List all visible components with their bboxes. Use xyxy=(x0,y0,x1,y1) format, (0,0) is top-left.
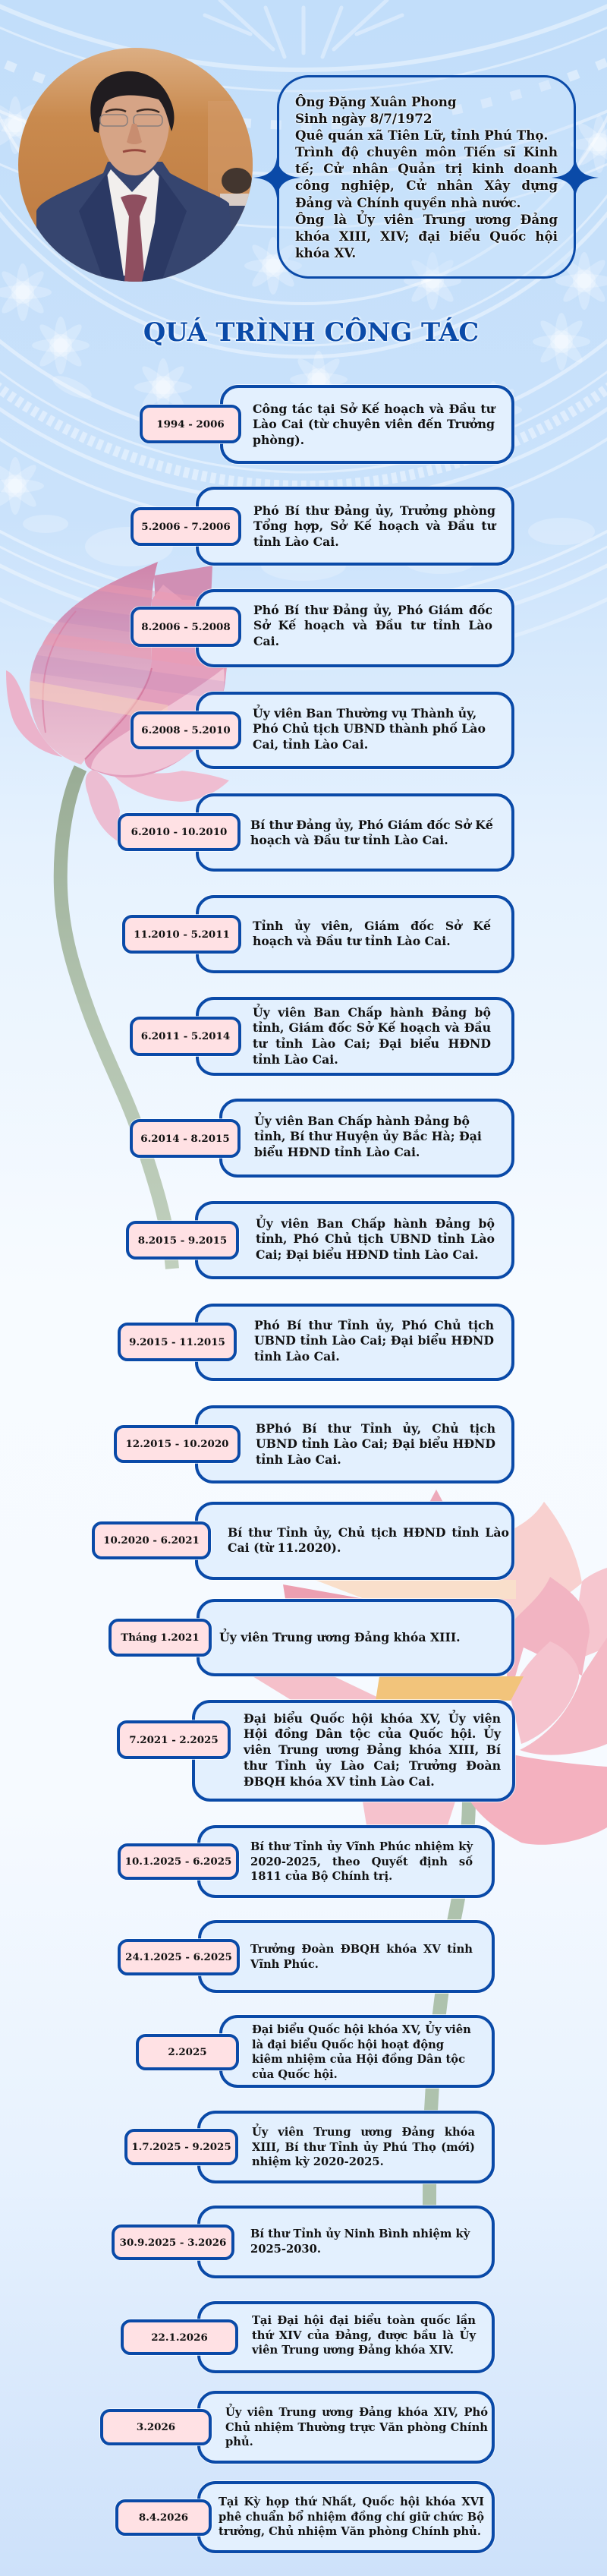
decoration: lotus bud left xyxy=(6,562,235,1269)
entry: 6.2014 - 8.2015: biểu HĐND tỉnh Lào Cai. xyxy=(254,1145,420,1159)
entry: 3.2026 xyxy=(99,2390,495,2464)
entry: 2.2025: của Quốc hội. xyxy=(252,2068,338,2081)
entry: 5.2006 - 7.2006 xyxy=(130,486,515,566)
entry: 24.1.2025 - 6.2025 xyxy=(117,1919,495,1994)
entry: 6.2010 - 10.2010 xyxy=(117,793,515,872)
entry: 8.4.2026 xyxy=(115,2480,495,2554)
intro text: Quê quán xã Tiên Lữ, tỉnh Phú Thọ. xyxy=(295,128,548,143)
title: QUÁ TRÌNH CÔNG TÁC xyxy=(143,317,479,347)
entry: 6.2011 - 5.2014: 6.2011 - 5.2014 xyxy=(141,1030,230,1042)
entry: 2.2025: kiêm nhiệm của Hội đồng Dân tộc xyxy=(252,2053,465,2066)
entry: 10.2020 - 6.2021: 10.2020 - 6.2021 xyxy=(103,1534,200,1547)
intro text: Sinh ngày 8/7/1972 xyxy=(295,111,432,126)
entry: 8.2015 - 9.2015: Ủy viên Ban Chấp hành Đảng bộ tỉnh, Phó Chủ tịch UBND tỉnh Lào Cai; Đại biểu HĐND tỉnh Lào Cai. xyxy=(256,1216,495,1262)
entry: 5.2006 - 7.2006: 5.2006 - 7.2006 xyxy=(141,521,231,533)
entry: 22.1.2026: 22.1.2026 xyxy=(151,2331,208,2343)
entry: 24.1.2025 - 6.2025: Trưởng Đoàn ĐBQH khóa XV tỉnh Vĩnh Phúc. xyxy=(250,1943,473,1971)
entry: Tháng 1.2021: Ủy viên Trung ương Đảng khóa XIII. xyxy=(219,1629,461,1644)
entry: 6.2008 - 5.2010: Phó Chủ tịch UBND thành phố Lào xyxy=(253,721,486,736)
intro text: Ông là Ủy viên Trung ương Đảng khóa XIII, XIV; đại biểu Quốc hội khóa XV. xyxy=(295,212,558,260)
entry: 30.9.2025 - 3.2026 xyxy=(111,2205,495,2279)
portrait photo xyxy=(18,48,598,282)
entry: 10.1.2025 - 6.2025 xyxy=(117,1824,495,1899)
entry: 12.2015 - 10.2020: BPhó Bí thư Tỉnh ủy, Chủ tịch UBND tỉnh Lào Cai; Đại biểu HĐND tỉnh Lào Cai. xyxy=(256,1421,495,1467)
entry: 7.2021 - 2.2025 xyxy=(117,1699,516,1802)
entry: 10.1.2025 - 6.2025: Bí thư Tỉnh ủy Vĩnh Phúc nhiệm kỳ 2020-2025, theo Quyết định số 1811 của Bộ Chính trị. xyxy=(250,1840,473,1883)
entry: 6.2008 - 5.2010: 6.2008 - 5.2010 xyxy=(141,724,231,736)
entry: 11.2010 - 5.2011: 11.2010 - 5.2011 xyxy=(134,928,230,940)
entry: 7.2021 - 2.2025: 7.2021 - 2.2025 xyxy=(129,1734,219,1746)
entry: 9.2015 - 11.2015: 9.2015 - 11.2015 xyxy=(129,1336,225,1348)
entry: 2.2025: 2.2025 xyxy=(168,2046,207,2058)
entry: 6.2010 - 10.2010: Bí thư Đảng ủy, Phó Giám đốc Sở Kế xyxy=(250,817,493,832)
entry: 6.2008 - 5.2010: Ủy viên Ban Thường vụ Thành ủy, xyxy=(253,706,476,720)
decoration: lotus flower right xyxy=(253,1490,607,2208)
entry: 10.2020 - 6.2021: Bí thư Tỉnh ủy, Chủ tịch HĐND tỉnh Lào Cai (từ 11.2020). xyxy=(228,1524,509,1555)
entry: 30.9.2025 - 3.2026: Bí thư Tỉnh ủy Ninh Bình nhiệm kỳ xyxy=(250,2228,470,2240)
entry: 22.1.2026 xyxy=(120,2300,495,2374)
entry: 6.2010 - 10.2010: 6.2010 - 10.2010 xyxy=(131,826,227,838)
intro text: Ông Đặng Xuân Phong xyxy=(295,94,457,109)
entry: 1.7.2025 - 9.2025: 1.7.2025 - 9.2025 xyxy=(131,2141,231,2153)
entry: 6.2011 - 5.2014 xyxy=(129,996,515,1077)
entry: 8.2006 - 5.2008: 8.2006 - 5.2008 xyxy=(141,621,231,633)
intro text xyxy=(294,93,558,260)
entry: 2.2025: là đại biểu Quốc hội hoạt động xyxy=(252,2038,444,2051)
entry: 22.1.2026: Tại Đại hội đại biểu toàn quốc lần thứ XIV của Đảng, được bầu là Ủy viên Trung ương Đảng khóa XIV. xyxy=(252,2314,476,2357)
entry: 1994 - 2006: Công tác tại Sở Kế hoạch và Đầu tư Lào Cai (từ chuyên viên đến Trưởng phòng). xyxy=(253,401,495,447)
entry: 24.1.2025 - 6.2025: 24.1.2025 - 6.2025 xyxy=(125,1951,232,1963)
entry: 6.2014 - 8.2015: Ủy viên Ban Chấp hành Đảng bộ xyxy=(254,1113,470,1128)
entry: 2.2025 xyxy=(135,2014,495,2089)
entry: 6.2008 - 5.2010: Cai, tỉnh Lào Cai. xyxy=(253,737,368,752)
entry: 8.2006 - 5.2008: Phó Bí thư Đảng ủy, Phó Giám đốc Sở Kế hoạch và Đầu tư tỉnh Lào Cai. xyxy=(253,603,492,648)
entry: 1.7.2025 - 9.2025: Ủy viên Trung ương Đảng khóa XIII, Bí thư Tỉnh ủy Phú Thọ (mới) nhiệm kỳ 2020-2025. xyxy=(252,2126,475,2168)
entry: 2.2025: Đại biểu Quốc hội khóa XV, Ủy viên xyxy=(252,2023,471,2036)
entry: 8.2006 - 5.2008 xyxy=(130,588,515,668)
entry: 5.2006 - 7.2006: Phó Bí thư Đảng ủy, Trưởng phòng Tổng hợp, Sở Kế hoạch và Đầu tư tỉnh Lào Cai. xyxy=(253,503,495,549)
entry: Tháng 1.2021 xyxy=(109,1598,515,1677)
entry: 3.2026: Ủy viên Trung ương Đảng khóa XIV, Phó Chủ nhiệm Thường trực Văn phòng Chính phủ. xyxy=(225,2406,488,2448)
entry: 11.2010 - 5.2011 xyxy=(121,894,515,974)
entry: 6.2014 - 8.2015: tỉnh, Bí thư Huyện ủy Bắc Hà; Đại xyxy=(254,1129,482,1143)
entry: 6.2014 - 8.2015 xyxy=(129,1098,515,1178)
intro panel xyxy=(253,75,599,279)
entry: Tháng 1.2021: Tháng 1.2021 xyxy=(121,1632,200,1644)
icon: left star xyxy=(253,157,300,198)
entry: 1994 - 2006 xyxy=(126,384,515,1256)
entry: 1.7.2025 - 9.2025 xyxy=(124,2110,495,2184)
entry: 8.4.2026: 8.4.2026 xyxy=(139,2511,188,2524)
entry: 12.2015 - 10.2020: 12.2015 - 10.2020 xyxy=(125,1438,229,1450)
entry: 10.1.2025 - 6.2025: 10.1.2025 - 6.2025 xyxy=(125,1856,231,1868)
entry: 6.2011 - 5.2014: Ủy viên Ban Chấp hành Đảng bộ tỉnh, Giám đốc Sở Kế hoạch và Đầu tư tỉnh Lào Cai; Đại biểu HĐND tỉnh Lào Cai. xyxy=(253,1005,491,1067)
entry: 7.2021 - 2.2025: Đại biểu Quốc hội khóa XV, Ủy viên Hội đồng Dân tộc của Quốc hội. Ủy viên Trung ương Đảng khóa XIII, Bí thư Tỉnh ủy Lào Cai; Trưởng Đoàn ĐBQH khóa XV tỉnh Lào Cai. xyxy=(244,1711,501,1789)
icon: right star xyxy=(552,162,599,194)
entry: 8.2015 - 9.2015: 8.2015 - 9.2015 xyxy=(138,1234,227,1247)
entry: 9.2015 - 11.2015 xyxy=(118,1304,514,1381)
intro text: Trình độ chuyên môn Tiến sĩ Kinh tế; Cử nhân Quản trị kinh doanh công nghiệp, Cử nhân Xây dựng Đảng và Chính quyền nhà nước. xyxy=(295,144,558,210)
entry: 6.2008 - 5.2010 xyxy=(130,691,515,770)
entry: 9.2015 - 11.2015: Phó Bí thư Tỉnh ủy, Phó Chủ tịch UBND tỉnh Lào Cai; Đại biểu HĐND tỉnh Lào Cai. xyxy=(254,1318,494,1364)
entry: 11.2010 - 5.2011: Tỉnh ủy viên, Giám đốc Sở Kế hoạch và Đầu tư tỉnh Lào Cai. xyxy=(253,919,491,948)
entry: 8.2015 - 9.2015 xyxy=(126,1200,514,1279)
panel frame xyxy=(277,75,576,279)
entry: 12.2015 - 10.2020 xyxy=(114,1405,514,1483)
entry: 8.4.2026: Tại Kỳ họp thứ Nhất, Quốc hội khóa XVI phê chuẩn bổ nhiệm đồng chí giữ chức Bộ trưởng, Chủ nhiệm Văn phòng Chính phủ. xyxy=(219,2496,484,2538)
entry: 3.2026: 3.2026 xyxy=(137,2421,175,2433)
entry: 6.2010 - 10.2010: hoạch và Đầu tư tỉnh Lào Cai. xyxy=(250,833,448,847)
entry: 30.9.2025 - 3.2026: 30.9.2025 - 3.2026 xyxy=(120,2237,226,2249)
entry: 1994 - 2006: 1994 - 2006 xyxy=(156,418,225,430)
entry: 6.2014 - 8.2015: 6.2014 - 8.2015 xyxy=(140,1133,230,1145)
entry: 10.2020 - 6.2021 xyxy=(92,1501,515,1581)
entry: 30.9.2025 - 3.2026: 2025-2030. xyxy=(250,2243,321,2256)
